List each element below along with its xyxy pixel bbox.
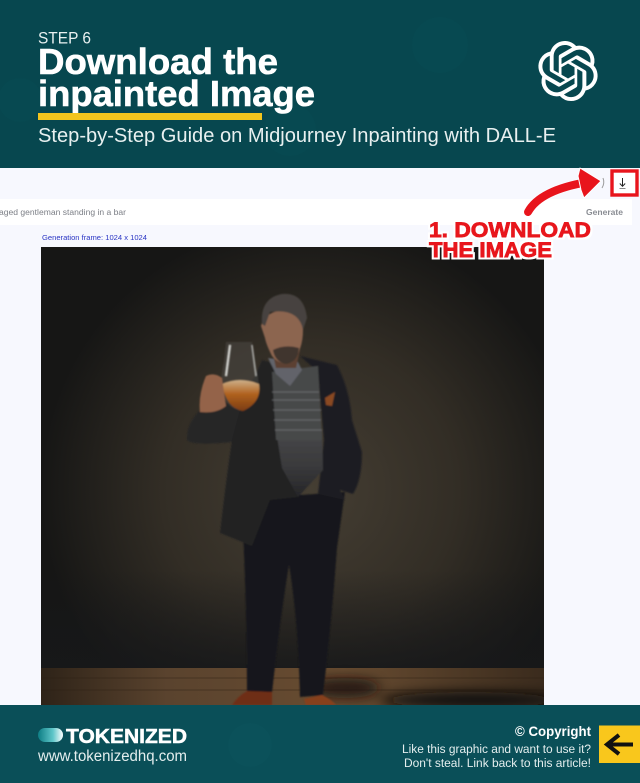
lower fade xyxy=(172,602,448,668)
footer panel xyxy=(0,705,640,783)
hand xyxy=(200,374,226,412)
copyright heading: © Copyright xyxy=(515,724,591,739)
vest xyxy=(277,440,324,496)
face xyxy=(261,310,303,363)
yellow arrow tab xyxy=(599,726,640,763)
jacket right panel xyxy=(300,356,362,500)
icon: OpenAI logo xyxy=(538,41,598,101)
copyright text: Don't steal. Link back to this article! xyxy=(404,756,591,770)
glass xyxy=(221,342,259,411)
generation frame label: Generation frame: 1024 x 1024 xyxy=(42,233,147,242)
shirt xyxy=(272,366,322,440)
photo: man with whisky glass xyxy=(41,247,560,708)
title: Download the xyxy=(38,41,278,82)
title: inpainted Image xyxy=(38,73,315,114)
page background xyxy=(0,168,640,705)
collar xyxy=(268,358,302,386)
title underline xyxy=(38,113,262,120)
callout: download the image: 1. DOWNLOAD xyxy=(429,219,591,242)
annotation: red box around download icon xyxy=(612,171,637,195)
left sleeve xyxy=(187,404,240,444)
copyright text: Like this graphic and want to use it? xyxy=(402,742,591,756)
beard xyxy=(273,346,299,364)
tokenized logo: TOKENIZED xyxy=(66,726,187,748)
hair xyxy=(262,294,307,330)
prompt text: aged gentleman standing in a bar xyxy=(0,207,126,217)
trousers xyxy=(243,492,345,697)
callout: download the image xyxy=(429,219,591,262)
neck xyxy=(272,350,300,368)
step label: STEP 6 xyxy=(38,30,91,48)
arrow pointing to download icon xyxy=(528,168,604,212)
jacket left panel xyxy=(220,360,298,546)
website: www.tokenizedhq.com xyxy=(37,748,187,765)
header panel xyxy=(0,0,640,168)
floor shadow xyxy=(380,692,560,708)
prompt bar xyxy=(0,199,632,225)
pocket square xyxy=(325,392,335,406)
callout: download the image: THE IMAGE xyxy=(429,239,552,262)
floor xyxy=(41,668,544,705)
title xyxy=(38,41,315,114)
copyright text xyxy=(402,742,591,770)
shoes xyxy=(232,691,272,705)
generate button: Generate xyxy=(586,207,623,217)
subtitle: Step-by-Step Guide on Midjourney Inpainting with DALL-E xyxy=(38,125,556,147)
icon: download arrow xyxy=(620,178,626,188)
